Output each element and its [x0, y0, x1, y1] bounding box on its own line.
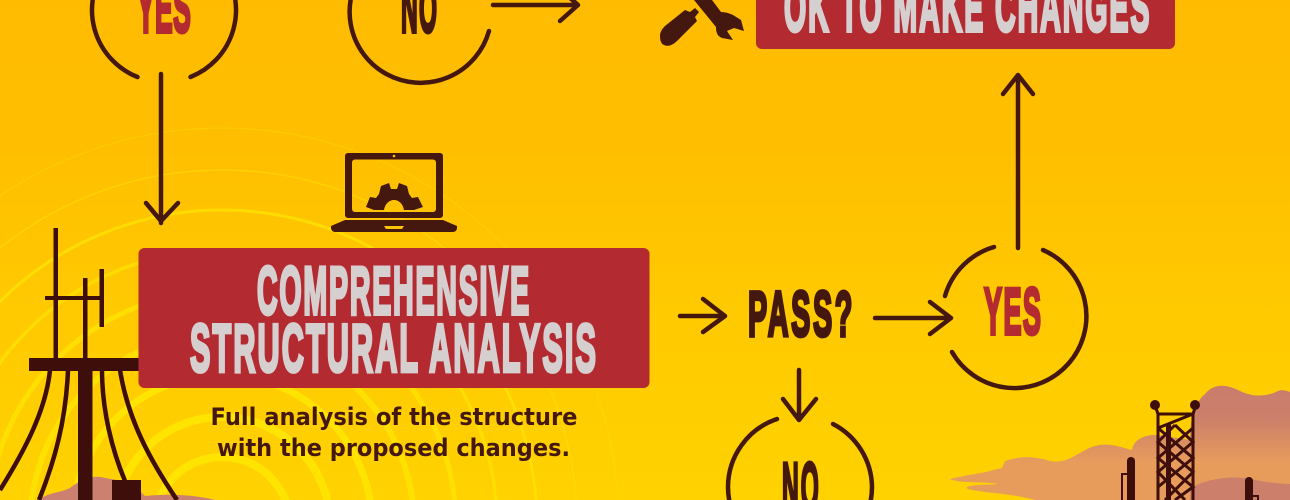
- description text: with the proposed changes.: [217, 434, 570, 462]
- hills: right: [950, 386, 1290, 500]
- banner: comprehensive structural analysis: STRUCTURAL ANALYSIS: [190, 311, 596, 387]
- antenna tower: left: [0, 228, 177, 500]
- description text: Full analysis of the structure: [210, 403, 578, 431]
- arrow: pass to yes: [875, 302, 951, 334]
- banner: comprehensive structural analysis: [138, 248, 650, 388]
- pipes: right: [1121, 457, 1259, 500]
- circle: lower yes: [945, 247, 1086, 388]
- icon: tools: [660, 0, 744, 46]
- concentric signal rings: [0, 128, 619, 500]
- hills: left: [40, 477, 215, 500]
- banner: comprehensive structural analysis: COMPREHENSIVE: [257, 254, 529, 330]
- pass label: PASS?: [748, 278, 852, 350]
- circle: top no: [350, 0, 489, 83]
- arrow: yes to ok: [1003, 75, 1033, 248]
- circle: top yes: [92, 0, 236, 77]
- circle: lower yes: YES: [984, 274, 1041, 348]
- lattice tower: right: [1152, 402, 1198, 500]
- circle: lower no: [728, 419, 872, 500]
- arrow: yes to analysis: [146, 74, 178, 223]
- description text: [210, 403, 578, 462]
- arrow: analysis to pass: [680, 299, 725, 332]
- arrow: no to changes: [493, 0, 578, 21]
- icon: laptop with gear: [331, 153, 457, 232]
- arrow: pass to no: [783, 370, 816, 420]
